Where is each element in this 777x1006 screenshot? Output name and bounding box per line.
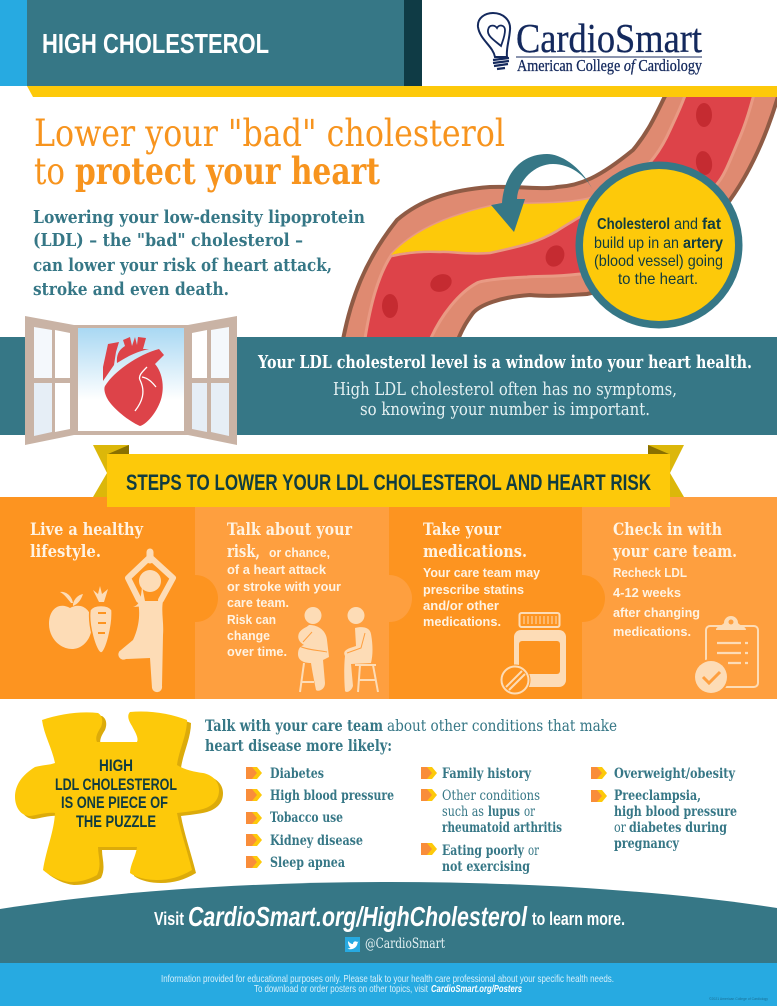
icon: heart xyxy=(103,337,164,426)
step 4: check in: Recheck LDL xyxy=(613,565,687,580)
panel: LDL window band xyxy=(0,337,777,435)
list: conditions column 2 xyxy=(421,766,562,875)
blood cells xyxy=(382,103,714,318)
footer: website call to action: Visit xyxy=(154,909,184,929)
list: conditions column 1 xyxy=(246,766,394,871)
conditions heading: Talk with your care team xyxy=(205,716,383,735)
band text xyxy=(333,379,677,420)
icon: clipboard with check xyxy=(693,616,758,695)
step 2: talk about risk: change xyxy=(227,628,270,643)
conditions heading xyxy=(205,716,617,755)
list: conditions column 3 xyxy=(591,766,737,852)
list: conditions column 1: Kidney disease xyxy=(270,833,363,849)
step 3: take medications: medications. xyxy=(423,614,501,629)
step 4: check in: medications. xyxy=(613,624,691,639)
step 4: check in: Check in with xyxy=(613,520,722,540)
icon: yoga pose xyxy=(118,552,173,692)
step 4: check in: after changing xyxy=(613,605,700,620)
banner: steps heading xyxy=(93,445,684,507)
callout: cholesterol and fat: fat xyxy=(702,216,722,233)
step 2: talk about risk: risk, xyxy=(227,542,260,562)
step 2: talk about risk: Talk about your xyxy=(227,520,353,540)
logo: CardioSmart: CardioSmart xyxy=(516,15,703,61)
icon: pill bottle xyxy=(500,613,566,696)
list: conditions column 2: such as xyxy=(442,804,484,820)
callout: cholesterol and fat: (blood vessel) going xyxy=(594,253,723,270)
header bar xyxy=(0,0,777,97)
footer: disclaimer: CardioSmart.org/Posters xyxy=(431,983,522,995)
conditions heading: heart disease more likely: xyxy=(205,736,392,755)
intro text xyxy=(33,207,365,300)
step 4: check in xyxy=(612,520,758,695)
list: conditions column 3: Overweight/obesity xyxy=(614,766,736,782)
list: conditions column 2: or xyxy=(528,843,539,859)
header title: HIGH CHOLESTEROL xyxy=(42,28,269,59)
conditions heading: about other conditions that make xyxy=(387,716,617,735)
puzzle text: LDL CHOLESTEROL xyxy=(55,776,177,794)
list: conditions column 2: not exercising xyxy=(442,859,530,875)
curved arrow xyxy=(491,154,593,232)
callout: cholesterol and fat: artery xyxy=(683,235,723,252)
title: to xyxy=(34,150,65,193)
list: conditions column 3: diabetes during xyxy=(629,820,727,836)
callout: cholesterol and fat xyxy=(576,162,742,328)
footer: disclaimer: ©2021 American College of Cardiology xyxy=(709,997,768,1001)
footer: website call to action xyxy=(0,882,777,964)
icon: twitter xyxy=(345,937,360,952)
artery illustration xyxy=(342,90,777,345)
list: conditions column 3: Preeclampsia, xyxy=(614,788,701,804)
plaque xyxy=(391,199,592,255)
step 4: check in: 4-12 weeks xyxy=(613,585,681,600)
intro text: (LDL) – the "bad" cholesterol – xyxy=(33,230,303,251)
title xyxy=(34,112,505,193)
list: conditions column 2: or xyxy=(524,804,535,820)
footer: website call to action: @CardioSmart xyxy=(365,936,445,952)
list: conditions column 1: Tobacco use xyxy=(270,810,343,826)
step 1: healthy lifestyle xyxy=(30,520,173,692)
step 3: take medications: Your care team may xyxy=(423,565,541,580)
list: conditions column 2: Family history xyxy=(442,766,532,782)
step 4: check in: your care team. xyxy=(612,542,737,562)
step 3: take medications xyxy=(423,520,566,696)
footer: website call to action: to learn more. xyxy=(532,909,625,929)
step 2: talk about risk: care team. xyxy=(227,595,289,610)
step 1: healthy lifestyle: Live a healthy xyxy=(30,520,144,540)
intro text: Lowering your low-density lipoprotein xyxy=(33,207,365,228)
step 2: talk about risk: Risk can xyxy=(227,612,276,627)
footer: disclaimer: To download or order posters on other topics, visit xyxy=(254,983,428,995)
list: conditions column 1: Sleep apnea xyxy=(270,855,345,871)
icon: window with heart xyxy=(25,316,237,445)
panel: steps background xyxy=(0,497,777,699)
list: conditions column 1: High blood pressure xyxy=(270,788,394,804)
list: conditions column 1: Diabetes xyxy=(270,766,324,782)
callout: cholesterol and fat: build up in an xyxy=(594,235,679,252)
intro text: can lower your risk of heart attack, xyxy=(33,255,332,276)
list: conditions column 2: lupus xyxy=(488,804,520,820)
list: conditions column 3: high blood pressure xyxy=(614,804,737,820)
list: conditions column 2: rheumatoid arthritis xyxy=(442,820,562,836)
step 3: take medications: and/or other xyxy=(423,598,499,613)
step 2: talk about risk: or chance, xyxy=(269,545,330,560)
icon: two people talking xyxy=(298,607,378,692)
step 3: take medications: Take your xyxy=(423,520,502,540)
step 3: take medications: medications. xyxy=(423,542,527,562)
list: conditions column 2: Other conditions xyxy=(442,788,540,804)
puzzle text: HIGH xyxy=(99,757,133,775)
step 2: talk about risk xyxy=(227,520,378,692)
callout: cholesterol and fat: and xyxy=(674,216,698,233)
puzzle text: IS ONE PIECE OF xyxy=(61,794,168,812)
intro text: stroke and even death. xyxy=(33,279,229,300)
footer: disclaimer xyxy=(0,963,777,1006)
callout: cholesterol and fat: Cholesterol xyxy=(597,216,670,233)
icon: apple and carrot xyxy=(49,586,112,653)
band text: so knowing your number is important. xyxy=(360,399,650,420)
list: conditions column 3: pregnancy xyxy=(614,836,680,852)
footer: website call to action: CardioSmart.org/HighCholesterol xyxy=(188,901,528,932)
logo: CardioSmart xyxy=(478,13,703,75)
list: conditions column 2: Eating poorly xyxy=(442,843,525,859)
callout: cholesterol and fat: to the heart. xyxy=(618,271,698,288)
list: conditions column 3: or xyxy=(614,820,626,836)
footer: disclaimer: Information provided for educational purposes only. Please talk to your health care professional about your specific health needs. xyxy=(161,973,614,985)
step 2: talk about risk: or stroke with your xyxy=(227,579,341,594)
title: protect your heart xyxy=(75,149,380,193)
step 3: take medications: prescribe statins xyxy=(423,582,524,597)
step 1: healthy lifestyle: lifestyle. xyxy=(30,542,101,562)
puzzle piece xyxy=(15,711,223,885)
step 2: talk about risk: over time. xyxy=(227,644,287,659)
puzzle text xyxy=(55,757,177,831)
puzzle text: THE PUZZLE xyxy=(76,813,156,831)
title: Lower your "bad" cholesterol xyxy=(34,112,505,155)
step 2: talk about risk: of a heart attack xyxy=(227,562,327,577)
band text: High LDL cholesterol often has no symptoms, xyxy=(333,379,677,400)
logo: CardioSmart: American College of Cardiology xyxy=(517,56,703,75)
